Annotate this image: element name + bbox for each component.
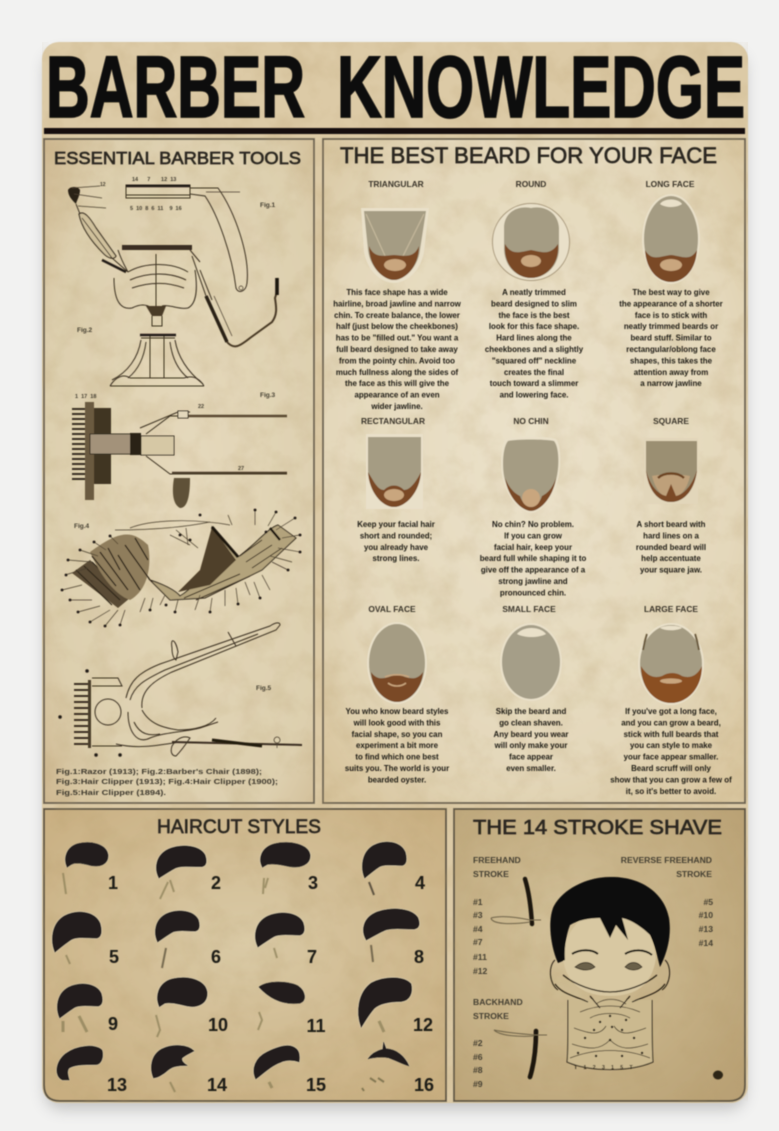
beard: rectangular: strong lines. xyxy=(373,554,419,563)
haircut 10: 10 xyxy=(208,1015,228,1035)
haircut 8: 8 xyxy=(414,947,424,967)
beard: round: ROUND xyxy=(516,179,546,189)
haircut 5 xyxy=(52,912,119,967)
heading: the best beard for your face: THE BEST BEARD FOR YOUR FACE xyxy=(340,143,717,168)
freehand stroke list: #12 xyxy=(473,966,488,976)
haircut 5: 5 xyxy=(109,947,119,967)
beard: round: the face is the best xyxy=(498,311,570,320)
beard: large face xyxy=(610,604,732,796)
panel: haircut styles background xyxy=(44,809,446,1101)
beard: rectangular xyxy=(357,416,435,563)
beard: oval face: You who know beard styles xyxy=(346,707,449,716)
beard: no chin: No chin? No problem. xyxy=(492,520,574,529)
heading: haircut styles: HAIRCUT STYLES xyxy=(157,816,321,838)
haircut 13: 13 xyxy=(107,1075,127,1095)
haircut 13 xyxy=(57,1046,127,1095)
beard: round: and lowering face. xyxy=(500,391,568,400)
beard: round: cheekbones and a slightly xyxy=(485,345,584,354)
beard: large face: it, so it's better to avoid. xyxy=(626,787,716,796)
beard: small face: will only make your xyxy=(494,741,567,750)
backhand stroke list xyxy=(473,997,523,1089)
freehand stroke list: #4 xyxy=(473,924,483,934)
figure 2: barber's chair: Fig.2 xyxy=(77,327,93,334)
reverse freehand stroke list: REVERSE FREEHAND xyxy=(621,855,712,865)
figure 4: hair clipper xyxy=(62,510,300,626)
panel: the best beard for your face xyxy=(333,143,732,796)
haircut 9: 9 xyxy=(108,1014,118,1034)
beard: small face xyxy=(494,604,568,773)
icon: freehand razor xyxy=(491,879,541,924)
beard: long face: shapes, this takes the xyxy=(630,356,713,365)
haircut 7 xyxy=(255,913,317,967)
figure 3: hair clipper: 1 17 18 xyxy=(75,394,96,400)
figure 1: razor: 14 7 12 13 xyxy=(132,177,176,183)
freehand stroke list: #11 xyxy=(473,952,487,962)
figure 3: hair clipper: Fig.3 xyxy=(260,392,276,399)
beard: long face: a narrow jawline xyxy=(640,379,702,388)
beard: triangular: full beard designed to take away xyxy=(336,345,458,354)
beard: large face: LARGE FACE xyxy=(644,604,698,614)
reverse freehand stroke list: #14 xyxy=(699,938,713,948)
freehand stroke list: #1 xyxy=(473,897,483,907)
reverse freehand stroke list: #5 xyxy=(703,897,713,907)
reverse freehand stroke list: #10 xyxy=(699,910,713,920)
beard: large face: you can style to make xyxy=(630,741,713,750)
beard: round xyxy=(485,179,584,400)
beard: triangular: chin. To create balance, the lower xyxy=(334,311,460,320)
beard: no chin: facial hair, keep your xyxy=(494,543,572,552)
figure 1: razor: Fig.1 xyxy=(260,202,276,209)
beard: triangular: wider jawline. xyxy=(370,402,423,411)
haircut 12 xyxy=(358,978,433,1035)
backhand stroke list: #6 xyxy=(473,1052,483,1062)
haircut 16: 16 xyxy=(414,1075,434,1095)
haircut 14 xyxy=(151,1045,227,1095)
figure 1: razor: 5 10 8 6 11 9 16 xyxy=(130,206,182,212)
rivet hole xyxy=(713,1070,723,1080)
beard: no chin: give off the appearance of a xyxy=(481,566,586,575)
beard: round: Hard lines along the xyxy=(496,334,572,343)
figure 3: hair clipper: 27 xyxy=(238,466,244,472)
figure caption: Fig.3:Hair Clipper (1913); Fig.4:Hair Clipper (1900); xyxy=(56,777,278,786)
heading: the 14 stroke shave: THE 14 STROKE SHAVE xyxy=(473,817,722,839)
freehand stroke list: #7 xyxy=(473,937,483,947)
beard: oval face: will look good with this xyxy=(353,718,441,727)
figure 3: hair clipper: 22 xyxy=(198,404,204,410)
haircut 16 xyxy=(362,1042,434,1095)
haircut 15: 15 xyxy=(306,1075,326,1095)
haircut 9 xyxy=(57,984,118,1034)
beard: no chin: beard full while shaping it to xyxy=(480,554,586,563)
beard: triangular: from the pointy chin. Avoid too xyxy=(339,356,455,365)
figure 2: barber's chair: 12 xyxy=(100,182,106,188)
beard: small face: SMALL FACE xyxy=(502,604,556,614)
haircut 6 xyxy=(155,911,221,968)
haircut 3: 3 xyxy=(308,873,318,893)
beard: long face: LONG FACE xyxy=(646,179,695,189)
beard: no chin: If you can grow xyxy=(504,531,563,540)
illustration: face and neck stroke map xyxy=(550,877,670,1071)
haircut 1: 1 xyxy=(108,873,118,893)
beard: long face: rectangular/oblong face xyxy=(626,345,716,354)
freehand stroke list: STROKE xyxy=(473,869,509,879)
beard: square: hard lines on a xyxy=(643,531,699,540)
beard: no chin xyxy=(480,416,586,597)
beard: long face: attention away from xyxy=(634,368,708,377)
haircut 11: 11 xyxy=(306,1016,326,1036)
heading: essential barber tools: ESSENTIAL BARBER TOOLS xyxy=(54,148,301,168)
beard: long face: face is to stick with xyxy=(635,311,707,320)
beard: large face: stick with full beards that xyxy=(624,730,719,739)
haircut 10 xyxy=(156,978,228,1037)
beard: no chin: strong jawline and xyxy=(498,577,568,586)
reverse freehand stroke list xyxy=(621,855,713,948)
beard: triangular xyxy=(333,179,462,411)
beard: triangular: This face shape has a wide xyxy=(346,288,448,297)
beard: triangular: much fullness along the sides of xyxy=(336,368,459,377)
haircut 4: 4 xyxy=(415,873,425,893)
figure caption: Fig.1:Razor (1913); Fig.2:Barber's Chair (1898); xyxy=(56,767,262,776)
haircut 14: 14 xyxy=(207,1075,227,1095)
beard: small face: go clean shaven. xyxy=(499,718,563,727)
beard: large face: and you can grow a beard, xyxy=(621,718,721,727)
haircut 4 xyxy=(362,842,425,895)
backhand stroke list: BACKHAND xyxy=(473,997,523,1007)
figure 5: hair clipper: Fig.5 xyxy=(256,685,272,692)
beard: square xyxy=(636,416,706,575)
reverse freehand stroke list: STROKE xyxy=(676,869,712,879)
figure caption: Fig.5:Hair Clipper (1894). xyxy=(56,788,166,797)
beard: oval face: to find which one best xyxy=(355,753,439,762)
beard: round: creates the final xyxy=(504,368,564,377)
beard: round: look for this face shape. xyxy=(489,322,579,331)
haircut 2: 2 xyxy=(211,873,221,893)
freehand stroke list: #3 xyxy=(473,910,483,920)
haircut 12: 12 xyxy=(413,1015,433,1035)
beard: large face: show that you can grow a few of xyxy=(610,775,732,784)
beard: small face: even smaller. xyxy=(506,764,556,773)
backhand stroke list: #2 xyxy=(473,1038,483,1048)
haircut 15 xyxy=(254,1046,326,1095)
figure caption xyxy=(56,767,278,797)
reverse freehand stroke list: #13 xyxy=(699,924,713,934)
haircut 1 xyxy=(63,843,118,894)
figure 5: hair clipper xyxy=(60,623,302,756)
beard: no chin: NO CHIN xyxy=(513,416,549,426)
beard: rectangular: RECTANGULAR xyxy=(361,416,425,426)
beard: oval face xyxy=(345,604,449,784)
title: BARBER xyxy=(46,39,305,136)
panel: 14 stroke shave background xyxy=(454,809,745,1101)
beard: large face: Beard scruff will only xyxy=(631,764,712,773)
backhand stroke list: #9 xyxy=(473,1079,483,1089)
panel: essential barber tools background xyxy=(44,139,314,803)
beard: triangular: TRIANGULAR xyxy=(368,179,424,189)
beard: long face: beard stuff. Similar to xyxy=(630,334,712,343)
panel: the 14 stroke shave xyxy=(473,817,723,1089)
beard: round: touch toward a slimmer xyxy=(490,379,578,388)
beard: long face xyxy=(619,179,723,388)
backhand stroke list: STROKE xyxy=(473,1011,509,1021)
panel: haircut styles xyxy=(52,816,434,1095)
beard: long face: the appearance of a shorter xyxy=(619,299,723,308)
beard: oval face: facial shape, so you can xyxy=(352,730,443,739)
beard: oval face: bearded oyster. xyxy=(368,775,426,784)
beard: small face: face appear xyxy=(509,753,553,762)
beard: square: SQUARE xyxy=(653,416,689,426)
panel: best beard background xyxy=(323,139,745,803)
beard: large face: your face appear smaller. xyxy=(624,753,718,762)
beard: oval face: suits you. The world is your xyxy=(345,764,449,773)
beard: triangular: half (just below the cheekbones) xyxy=(336,322,458,331)
figure 3: hair clipper xyxy=(72,392,287,508)
beard: oval face: experiment a bit more xyxy=(356,741,439,750)
beard: rectangular: Keep your facial hair xyxy=(357,520,435,529)
beard: large face: If you've got a long face, xyxy=(625,707,717,716)
backhand stroke list: #8 xyxy=(473,1065,483,1075)
haircut 6: 6 xyxy=(211,947,221,967)
beard: no chin: pronounced chin. xyxy=(500,588,566,597)
beard: triangular: appearance of an even xyxy=(354,391,440,400)
beard: triangular: has to be "filled out." You want a xyxy=(336,334,459,343)
beard: round: beard designed to slim xyxy=(491,299,577,308)
beard: rectangular: you already have xyxy=(364,543,429,552)
beard: long face: neatly trimmed beards or xyxy=(624,322,718,331)
haircut 3 xyxy=(261,843,318,894)
figure 4: hair clipper: Fig.4 xyxy=(74,523,90,530)
haircut 2 xyxy=(156,846,221,899)
figure 1: razor xyxy=(126,177,276,291)
freehand stroke list xyxy=(473,855,521,976)
figure 2: barber's chair xyxy=(68,182,278,386)
haircut 11 xyxy=(258,982,326,1036)
beard: oval face: OVAL FACE xyxy=(368,604,416,614)
icon: backhand razor xyxy=(494,1030,547,1077)
beard: long face: The best way to give xyxy=(632,288,710,297)
beard: small face: Skip the beard and xyxy=(496,707,566,716)
beard: square: help accentuate xyxy=(641,554,701,563)
panel: essential barber tools xyxy=(54,148,302,797)
beard: triangular: hairline, broad jawline and narrow xyxy=(333,299,462,308)
beard: rectangular: short and rounded; xyxy=(360,531,432,540)
beard: square: rounded beard will xyxy=(636,543,706,552)
beard: square: A short beard with xyxy=(637,520,706,529)
haircut 7: 7 xyxy=(307,947,317,967)
title xyxy=(46,39,745,136)
illustration: face and neck stroke map: T 1 2 3 1 5 T xyxy=(574,1065,633,1071)
freehand stroke list: FREEHAND xyxy=(473,855,521,865)
beard: small face: Any beard you wear xyxy=(494,730,568,739)
beard: triangular: the face as this will give the xyxy=(345,379,450,388)
beard: square: your square jaw. xyxy=(640,566,702,575)
beard: round: A neatly trimmed xyxy=(502,288,566,297)
haircut 8 xyxy=(364,909,424,967)
title rule xyxy=(44,128,745,134)
beard: round: "squared off" neckline xyxy=(492,356,577,365)
